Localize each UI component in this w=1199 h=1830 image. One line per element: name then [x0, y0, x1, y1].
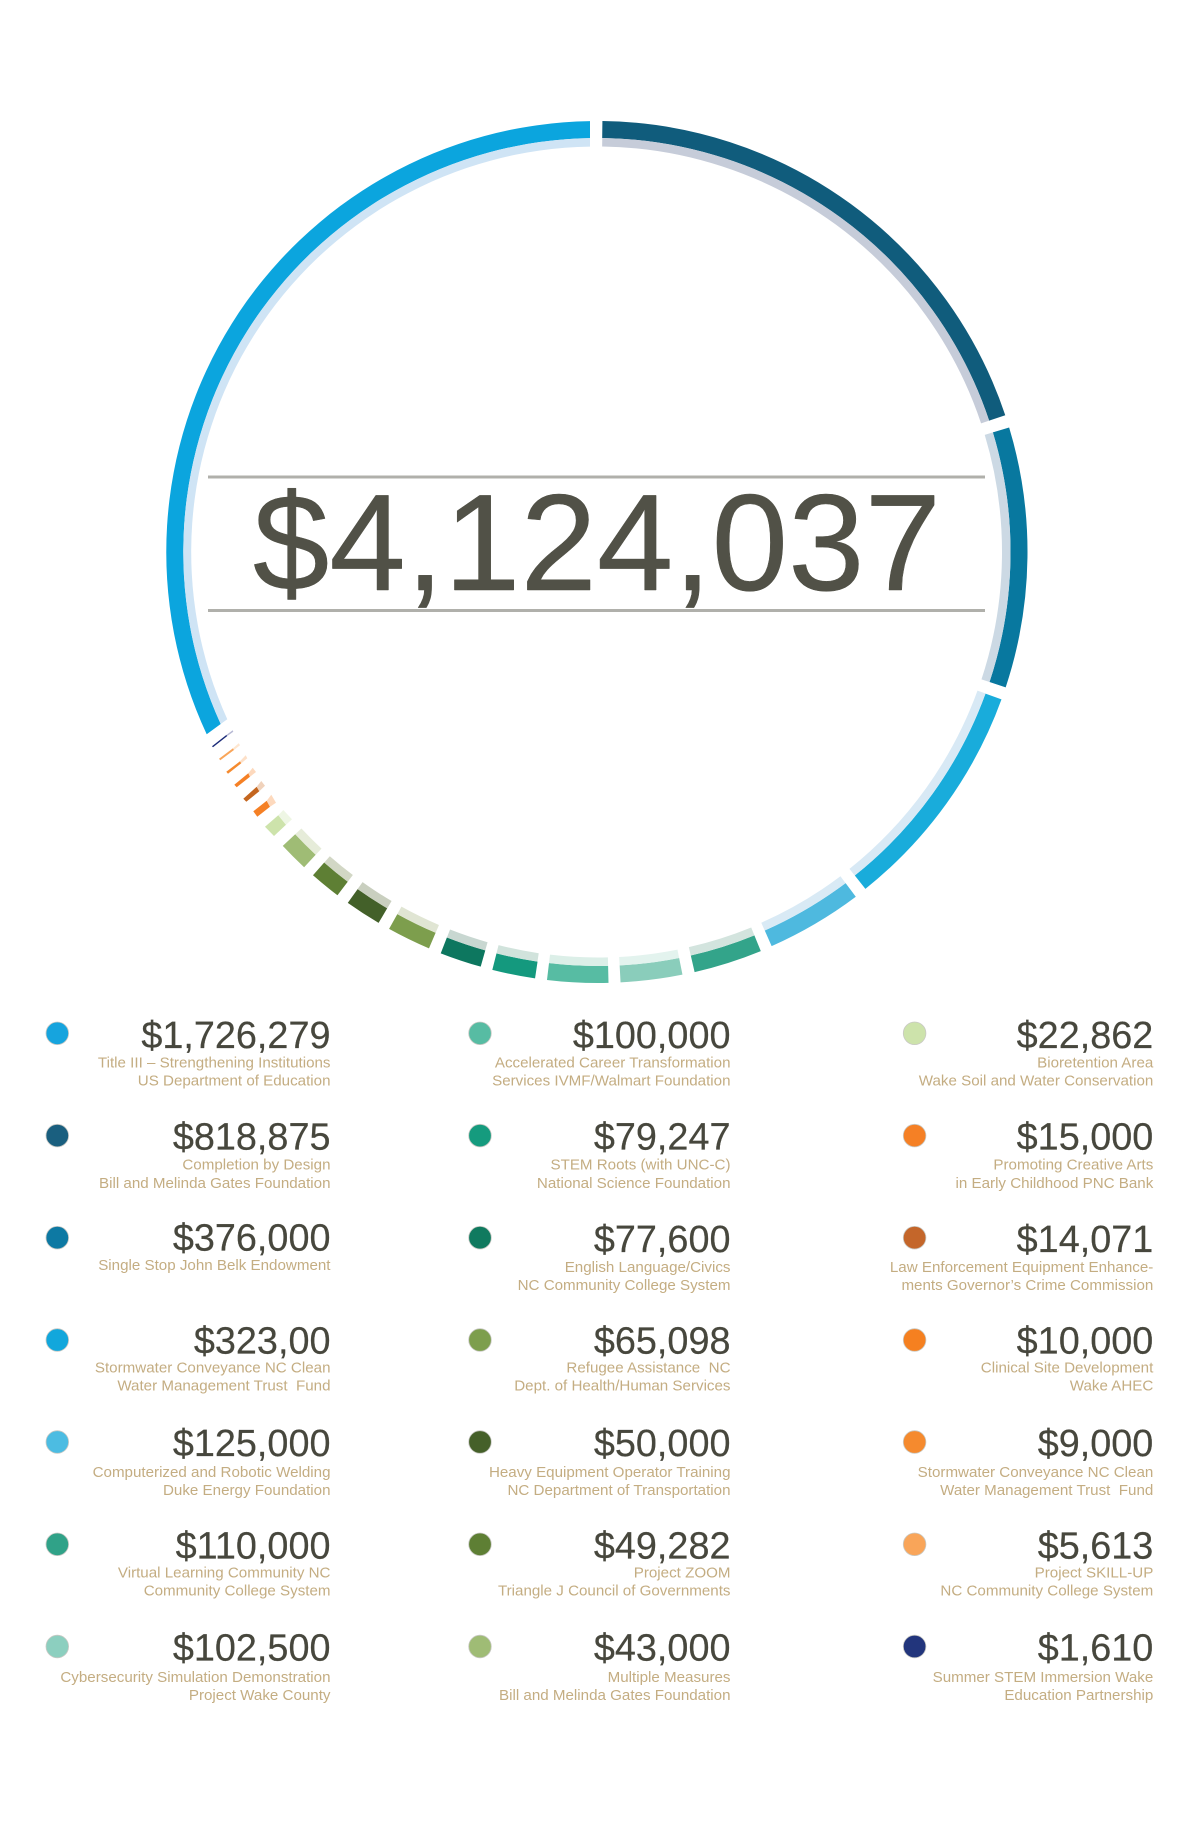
- segment: Creative Arts: [253, 795, 276, 817]
- legend item: Bioretention Area: Wake Soil and Water Conservation: [919, 1072, 1153, 1090]
- segment: English Language: [444, 934, 486, 958]
- legend item: Project SKILL-UP: $5,613: [1038, 1526, 1153, 1568]
- legend item: Title III: [46, 1015, 331, 1090]
- legend item: Summer STEM: [903, 1628, 1153, 1704]
- segment: Single Stop: [986, 430, 1019, 685]
- legend item: Creative Arts: [903, 1116, 1154, 1192]
- legend item: Heavy Equipment: Heavy Equipment Operator Training: [489, 1464, 730, 1481]
- legend item: Summer STEM: $1,610: [1038, 1628, 1153, 1670]
- legend item: Stormwater Conveyance: Water Management Trust Fund: [940, 1482, 1153, 1499]
- legend item: Law Enforcement: ments Governor’s Crime Commission: [901, 1277, 1153, 1294]
- segment: Summer STEM: [212, 730, 233, 747]
- segment: Stormwater Conveyance $9,000: [226, 755, 247, 774]
- legend item: Project SKILL-UP: [903, 1526, 1153, 1600]
- donut ring chart: [166, 121, 1019, 975]
- legend item: Creative Arts: $15,000: [1017, 1116, 1153, 1158]
- legend item: Virtual Learning: [46, 1526, 331, 1600]
- segment: Refugee Assistance: [393, 910, 437, 941]
- legend item: Single Stop: Single Stop John Belk Endowment: [98, 1257, 331, 1274]
- legend item: Law Enforcement: $14,071: [1017, 1219, 1153, 1261]
- legend item: Law Enforcement: Law Enforcement Equipment Enhance-: [890, 1259, 1153, 1276]
- legend column 1: [46, 1015, 331, 1704]
- legend item: STEM Roots: STEM Roots (with UNC-C): [550, 1156, 730, 1174]
- legend item: Project ZOOM: Triangle J Council of Governments: [498, 1583, 731, 1600]
- legend item: Cybersecurity: [46, 1628, 331, 1704]
- segment: Multiple Measures: [289, 831, 319, 861]
- legend item: Refugee Assistance: $65,098: [594, 1320, 730, 1362]
- legend item: Completion by Design: Completion by Design: [182, 1156, 330, 1174]
- segment: Project ZOOM: [319, 859, 350, 888]
- legend item: Bioretention Area: Bioretention Area: [1037, 1054, 1154, 1072]
- legend item: Summer STEM: Summer STEM Immersion Wake: [933, 1669, 1153, 1686]
- legend item: STEM Roots: $79,247: [594, 1116, 730, 1158]
- legend item: Project SKILL-UP: Project SKILL-UP: [1035, 1564, 1153, 1582]
- legend item: Completion by Design: $818,875: [173, 1116, 330, 1158]
- legend item: Robotic Welding: Duke Energy Foundation: [163, 1482, 330, 1499]
- legend item: Stormwater Conveyance: Stormwater Conveyance NC Clean: [918, 1464, 1153, 1481]
- segment: Law Enforcement: [243, 781, 265, 802]
- legend item: Robotic Welding: $125,000: [173, 1423, 330, 1465]
- legend item: Accelerated Career: $100,000: [573, 1015, 730, 1057]
- legend item: Heavy Equipment: NC Department of Transportation: [507, 1482, 730, 1499]
- legend item: Multiple Measures: $43,000: [594, 1628, 730, 1670]
- legend item: Law Enforcement: [890, 1219, 1153, 1294]
- legend item: Clinical Site: Clinical Site Development: [981, 1359, 1154, 1376]
- legend item: Clinical Site: $10,000: [1017, 1320, 1153, 1362]
- legend item: Title III: Title III – Strengthening Institutions: [98, 1054, 331, 1072]
- segment: Robotic Welding: [763, 880, 851, 938]
- legend item: Heavy Equipment: [469, 1423, 730, 1499]
- legend item: Completion by Design: Bill and Melinda Gates Foundation: [99, 1175, 330, 1192]
- legend item: Bioretention Area: $22,862: [1017, 1015, 1153, 1057]
- legend item: Title III: US Department of Education: [138, 1072, 330, 1090]
- legend item: Robotic Welding: [46, 1423, 330, 1499]
- legend item: Bioretention Area: [903, 1015, 1154, 1090]
- legend item: Single Stop: [46, 1218, 331, 1274]
- legend column 3: [890, 1015, 1154, 1704]
- total amount: $4,124,037: [253, 467, 941, 620]
- legend item: Project ZOOM: [469, 1526, 731, 1600]
- legend item: English Language: [469, 1219, 731, 1294]
- legend item: Multiple Measures: Multiple Measures: [608, 1669, 731, 1686]
- legend item: STEM Roots: [469, 1116, 730, 1192]
- segment: Project SKILL-UP: [219, 743, 240, 760]
- segment: Cybersecurity: [619, 954, 681, 974]
- legend item: Stormwater Conveyance: [903, 1423, 1153, 1499]
- legend item: Clinical Site: [903, 1320, 1154, 1394]
- legend item: Stormwater Conveyance: $323,00: [194, 1320, 330, 1362]
- legend item: Virtual Learning: Virtual Learning Community NC: [118, 1564, 331, 1582]
- legend item: Creative Arts: in Early Childhood PNC Bank: [956, 1175, 1154, 1192]
- legend item: Title III: $1,726,279: [141, 1015, 330, 1057]
- segment: Title III: [166, 121, 590, 734]
- legend item: Cybersecurity: Cybersecurity Simulation Demonstration: [60, 1669, 330, 1686]
- legend column 2: [469, 1015, 731, 1704]
- legend item: Completion by Design: [46, 1116, 330, 1192]
- legend item: Multiple Measures: Bill and Melinda Gates Foundation: [499, 1687, 730, 1704]
- legend item: English Language: $77,600: [594, 1219, 730, 1261]
- segment: Heavy Equipment: [353, 886, 389, 916]
- legend item: English Language: English Language/Civics: [565, 1259, 731, 1276]
- legend item: Project ZOOM: $49,282: [594, 1526, 730, 1568]
- legend item: STEM Roots: National Science Foundation: [537, 1175, 730, 1192]
- legend item: Virtual Learning: $110,000: [176, 1526, 330, 1568]
- segment: Stormwater Conveyance $323,00: [852, 692, 994, 882]
- legend item: Creative Arts: Promoting Creative Arts: [993, 1156, 1154, 1174]
- legend item: Cybersecurity: $102,500: [173, 1628, 330, 1670]
- legend item: Refugee Assistance: Dept. of Health/Human Services: [514, 1378, 731, 1394]
- legend item: English Language: NC Community College System: [518, 1277, 730, 1294]
- segment: STEM Roots: [494, 949, 538, 970]
- total amount with rules: [208, 467, 985, 620]
- segment: Virtual Learning: [690, 931, 758, 964]
- legend item: Clinical Site: Wake AHEC: [1070, 1378, 1153, 1394]
- legend item: Stormwater Conveyance: [46, 1320, 330, 1394]
- legend item: Refugee Assistance: Refugee Assistance NC: [566, 1359, 731, 1376]
- legend item: Heavy Equipment: $50,000: [594, 1423, 730, 1465]
- legend item: Single Stop: $376,000: [173, 1218, 330, 1260]
- legend item: Robotic Welding: Computerized and Robotic Welding: [93, 1464, 330, 1481]
- legend item: Summer STEM: Education Partnership: [1004, 1687, 1153, 1704]
- legend item: Accelerated Career: Services IVMF/Walmart Foundation: [492, 1072, 730, 1090]
- segment: Completion by Design: [602, 130, 997, 422]
- legend item: Stormwater Conveyance: $9,000: [1038, 1423, 1153, 1465]
- legend item: Project SKILL-UP: NC Community College System: [940, 1583, 1153, 1600]
- legend item: Stormwater Conveyance: Stormwater Conveyance NC Clean: [95, 1359, 330, 1376]
- legend item: Accelerated Career: Accelerated Career Transformation: [495, 1054, 730, 1072]
- segment: Clinical Site: [234, 768, 256, 787]
- legend item: Cybersecurity: Project Wake County: [189, 1687, 331, 1704]
- legend item: Accelerated Career: [469, 1015, 730, 1090]
- legend item: Stormwater Conveyance: Water Management Trust Fund: [117, 1378, 330, 1394]
- legend item: Refugee Assistance: [469, 1320, 731, 1394]
- legend item: Virtual Learning: Community College System: [144, 1583, 330, 1600]
- legend item: Project ZOOM: Project ZOOM: [634, 1564, 730, 1582]
- segment: Bioretention Area: [265, 810, 292, 836]
- segment: Accelerated Career: [548, 959, 608, 975]
- legend item: Multiple Measures: [469, 1628, 731, 1704]
